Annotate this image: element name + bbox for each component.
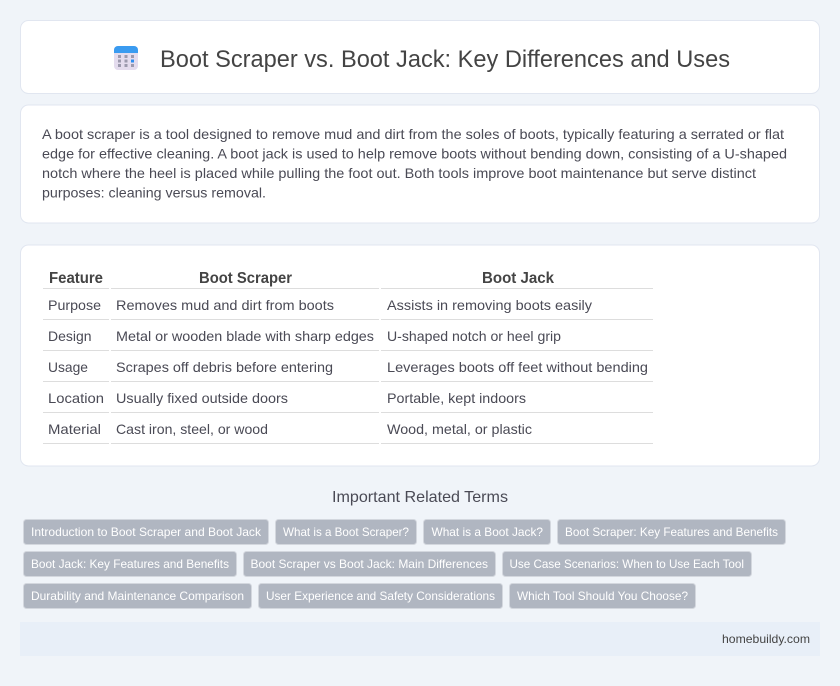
table header row: Boot Jack	[482, 270, 554, 287]
tag: boot jack features: Boot Jack: Key Features and Benefits	[31, 557, 229, 571]
text block: description	[42, 126, 787, 200]
table row: design: Metal or wooden blade with sharp edges	[116, 328, 374, 344]
table row: material	[48, 421, 532, 437]
panel: header	[20, 20, 820, 94]
table row: material: Wood, metal, or plastic	[387, 421, 532, 437]
icon: calendar	[114, 46, 138, 70]
tag: main differences: Boot Scraper vs Boot Jack: Main Differences	[250, 557, 488, 571]
tag: which tool	[510, 584, 696, 608]
table row: usage: Leverages boots off feet without bending	[387, 359, 648, 375]
tag: what is a boot jack: What is a Boot Jack?	[432, 525, 543, 539]
tag: boot scraper features: Boot Scraper: Key Features and Benefits	[565, 525, 778, 539]
table row: design	[48, 328, 561, 344]
tag: use case scenarios: Use Case Scenarios: When to Use Each Tool	[510, 557, 744, 571]
table row: usage	[48, 359, 648, 375]
text block: description: notch where the heel is placed while pulling the foot out. Both tools improve boot maintenance but serve distinct	[42, 165, 756, 181]
table row: location: Usually fixed outside doors	[116, 390, 288, 406]
panel: comparison table	[20, 245, 820, 466]
related term tags	[24, 520, 786, 608]
table row: usage: Usage	[48, 359, 88, 375]
table row: design: Design	[48, 328, 92, 344]
heading: related terms: Important Related Terms	[332, 489, 508, 506]
table row: design: U-shaped notch or heel grip	[387, 328, 561, 344]
tag: boot jack features	[24, 552, 236, 576]
table row: location: Location	[48, 390, 104, 406]
table grid lines	[43, 288, 653, 444]
table row: purpose: Removes mud and dirt from boots	[116, 297, 334, 313]
tag: main differences	[244, 552, 496, 576]
tag: user experience: User Experience and Safety Considerations	[266, 589, 495, 603]
table row: material: Material	[48, 421, 101, 437]
table row: purpose	[48, 297, 592, 313]
tag: introduction	[24, 520, 268, 544]
text block: description: purposes: cleaning versus removal.	[42, 184, 266, 200]
tag: what is a boot jack	[424, 520, 550, 544]
tag: durability: Durability and Maintenance Comparison	[31, 589, 244, 603]
table row: location: Portable, kept indoors	[387, 390, 526, 406]
table header row	[49, 270, 554, 287]
footer	[20, 622, 820, 656]
tag: durability	[24, 584, 252, 608]
table row: purpose: Assists in removing boots easily	[387, 297, 592, 313]
tag: what is a boot scraper	[276, 520, 416, 544]
tag: use case scenarios	[502, 552, 752, 576]
panel: introduction	[20, 105, 820, 223]
tag: introduction: Introduction to Boot Scraper and Boot Jack	[31, 525, 262, 539]
table row: location	[48, 390, 526, 406]
text block: description: edge for effective cleaning. A boot jack is used to help remove boots without bending down, consisting of a U-shaped	[42, 146, 787, 162]
tag: what is a boot scraper: What is a Boot Scraper?	[283, 525, 409, 539]
table row: purpose: Purpose	[48, 297, 101, 313]
table header row: Boot Scraper	[199, 270, 292, 287]
table header row: Feature	[49, 270, 103, 287]
tag: which tool: Which Tool Should You Choose?	[517, 589, 688, 603]
tag: boot scraper features	[558, 520, 786, 544]
table row: material: Cast iron, steel, or wood	[116, 421, 268, 437]
tag: user experience	[258, 584, 502, 608]
footer source: homebuildy.com	[722, 632, 810, 646]
text block: description: A boot scraper is a tool designed to remove mud and dirt from the soles of boots, typically featuring a serrated or flat	[42, 126, 784, 142]
table row: usage: Scrapes off debris before entering	[116, 359, 333, 375]
title: Boot Scraper vs. Boot Jack: Key Differences and Uses	[160, 46, 730, 73]
